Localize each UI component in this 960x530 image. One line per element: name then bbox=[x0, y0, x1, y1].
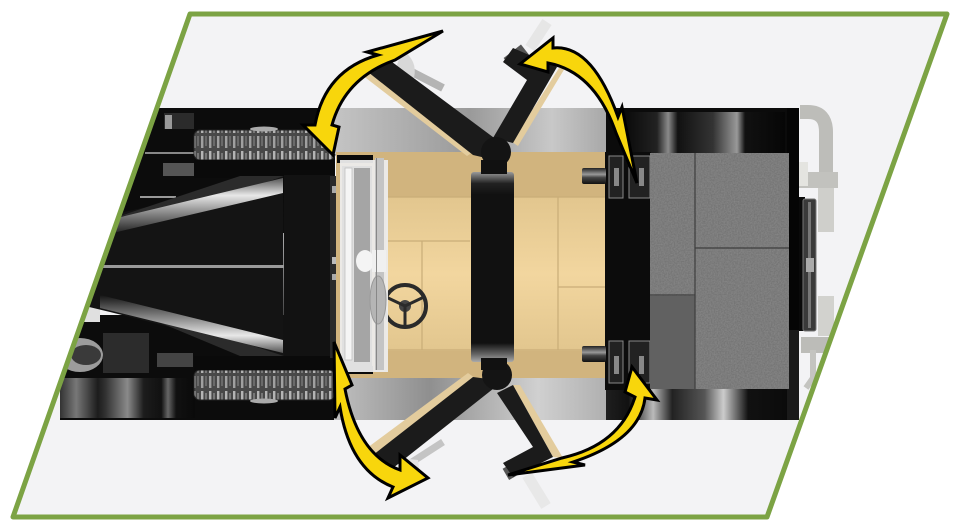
arrow: bottom right double-headed bbox=[508, 367, 657, 475]
rear frame block bbox=[605, 152, 651, 390]
door panel edge bbox=[362, 72, 473, 156]
interior floor bbox=[336, 152, 605, 378]
mirror bbox=[530, 22, 547, 48]
steering wheel bbox=[384, 285, 426, 327]
door: bottom left bbox=[367, 373, 503, 476]
arrow: top left double-headed bbox=[303, 31, 443, 155]
door lock pins bbox=[582, 168, 606, 362]
arrow: bottom left double-headed bbox=[334, 342, 428, 498]
side pipe at rear bbox=[794, 112, 838, 388]
windshield bbox=[337, 155, 388, 374]
hinge: top bbox=[481, 137, 511, 174]
mirror bbox=[527, 475, 546, 506]
centre pillar bar bbox=[471, 172, 514, 362]
front tyre upper bbox=[194, 126, 336, 160]
door panel edge bbox=[512, 68, 565, 146]
car body bbox=[57, 108, 838, 420]
door panel edge bbox=[367, 373, 475, 455]
door: top right bbox=[493, 22, 565, 146]
door sills in grey bbox=[334, 108, 606, 420]
hinge: bottom bbox=[481, 358, 512, 390]
door body bbox=[493, 48, 557, 143]
door body bbox=[497, 385, 553, 477]
front tyre lower bbox=[194, 370, 334, 404]
front upper body bbox=[122, 108, 335, 233]
arrow: top right double-headed bbox=[520, 38, 637, 183]
door body bbox=[373, 377, 503, 472]
rear wheels and rear body bbox=[600, 108, 799, 420]
front lower body with chrome bbox=[57, 300, 335, 420]
mirror bbox=[408, 70, 443, 88]
mirror bbox=[412, 442, 443, 462]
door: bottom right bbox=[497, 385, 563, 506]
door body bbox=[368, 56, 505, 162]
rear grille bbox=[799, 197, 816, 331]
door: top left bbox=[362, 50, 505, 162]
roof bbox=[650, 153, 789, 389]
hood bbox=[90, 176, 336, 358]
door panel edge bbox=[513, 385, 563, 458]
